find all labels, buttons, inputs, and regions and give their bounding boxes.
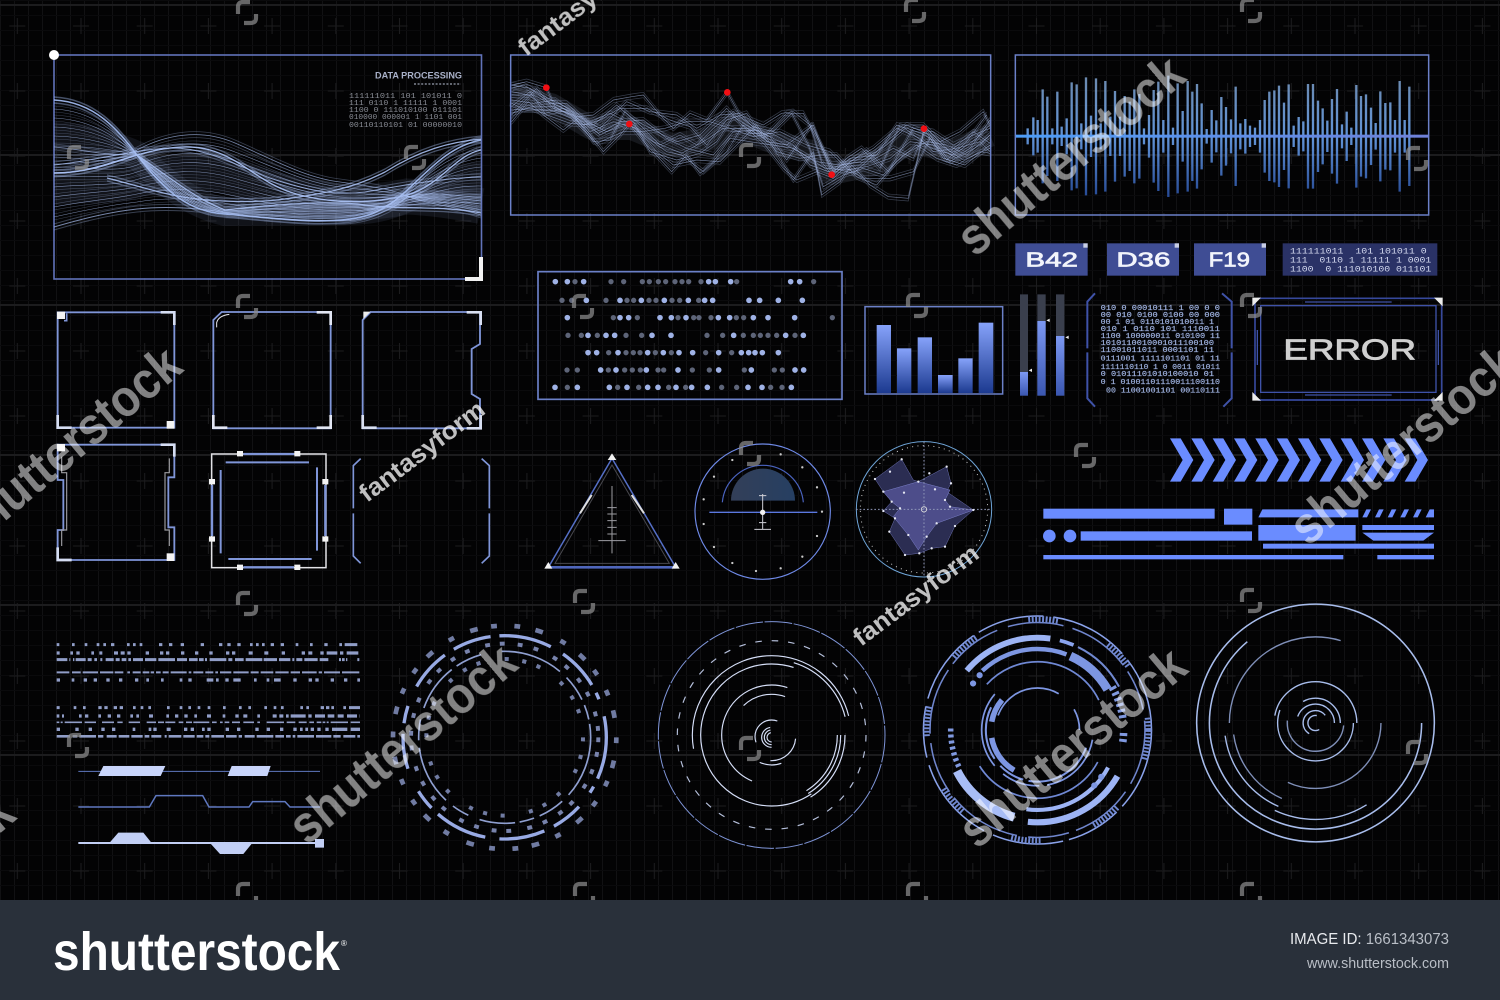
binary readout: 111 0110 1 11111 1 0001	[349, 100, 463, 108]
badge B42: B42	[1025, 249, 1078, 271]
footer logo: ®	[341, 939, 347, 948]
bracketed binary block: 1100 100000011 010100 11	[1101, 333, 1220, 341]
instruments row	[544, 442, 992, 579]
progress dots	[414, 83, 461, 85]
badge D36: D36	[1116, 249, 1170, 271]
bracketed binary block: 010 1 0110 101 1110011	[1101, 326, 1220, 334]
binary badge: 111111011 101 101011 0	[1290, 246, 1427, 256]
bracketed binary block: 00 010 0100 0100 00 000	[1101, 312, 1220, 320]
badges row	[1015, 243, 1443, 407]
error panel: ERROR	[1283, 335, 1416, 367]
panel: dot matrix	[538, 272, 1003, 399]
segmented ring	[923, 616, 1152, 844]
panel: audio waveform	[1015, 55, 1429, 215]
triangle gauge	[544, 453, 680, 569]
connector line 1	[78, 766, 320, 776]
chevron arrows	[1170, 438, 1428, 482]
bracketed binary block: 0 1 01001101110011100110	[1101, 379, 1220, 387]
frame 1	[57, 312, 174, 429]
data strips and connector lines	[57, 645, 360, 854]
binary readout	[349, 93, 463, 130]
frame 2	[213, 312, 331, 428]
binary badge	[1283, 243, 1437, 276]
thin arcs ring	[658, 622, 885, 848]
rings 1 and 2	[393, 622, 885, 849]
site url: www.shutterstock.com	[1306, 955, 1449, 972]
frame 6	[353, 459, 489, 563]
chevrons and bars	[1043, 438, 1434, 559]
badge F19: F19	[1209, 249, 1250, 271]
data strip upper	[57, 645, 360, 680]
connector line 2	[78, 796, 320, 807]
binary badge: 1100 0 111010100 011101	[1290, 265, 1431, 275]
binary readout: 00110110101 01 00000010	[349, 122, 463, 130]
binary readout: 111111011 101 101011 0	[349, 93, 463, 101]
badge F19	[1194, 243, 1266, 276]
frame 3	[363, 312, 481, 428]
wave bundle	[54, 97, 481, 230]
bracketed binary block: 1111110110 1 0 0011 01011	[1101, 364, 1220, 372]
bracketed binary block: 0111001 1111101101 01 11	[1101, 356, 1220, 364]
horizon gauge	[695, 444, 830, 579]
connector line 3	[78, 833, 324, 854]
radar chart	[856, 442, 992, 577]
frame 5	[209, 451, 328, 570]
bar chart	[865, 307, 1003, 394]
watermarks: fantasyform	[848, 539, 984, 652]
panel: data processing waves	[49, 50, 482, 279]
bracketed binary block: 11001011011 0001101 11	[1101, 347, 1214, 355]
level meters	[1020, 294, 1069, 396]
tech bars	[1043, 509, 1434, 559]
watermarks: fantasyform	[354, 395, 490, 508]
error panel	[1252, 298, 1443, 401]
watermarks: shutterstock	[945, 44, 1196, 267]
badge B42	[1015, 243, 1088, 276]
bracketed binary block: 00 11001001101 00110111	[1106, 387, 1220, 395]
bracketed binary block: 00 1 01 0110101010011 1	[1101, 319, 1214, 327]
frames group	[57, 312, 489, 570]
footer bar	[0, 900, 1500, 1000]
binary readout: 010000 000001 1 1101 001	[349, 114, 463, 122]
spiral ring	[1197, 604, 1434, 842]
bracketed binary block: 0 01011101010100010 01	[1101, 371, 1214, 379]
watermarks: shutterstock	[277, 632, 528, 855]
frame 4	[57, 444, 174, 561]
image id: IMAGE ID: 1661343073	[1290, 931, 1449, 948]
data strip lower	[57, 708, 360, 736]
dashed ring	[393, 626, 616, 849]
heading: data processing: DATA PROCESSING	[375, 70, 462, 82]
binary readout: 1100 0 111010100 011101	[349, 107, 463, 115]
badge D36	[1107, 243, 1179, 276]
bracketed binary block: 1010110010001011100100	[1101, 340, 1214, 348]
footer logo: shutterstock	[53, 922, 341, 982]
watermarks: shutterstock	[947, 636, 1198, 859]
binary badge: 111 0110 1 11111 1 0001	[1290, 255, 1431, 265]
panel: jagged line chart	[511, 55, 991, 215]
bracketed binary block: 010 0 00010111 1 00 0 0	[1101, 305, 1220, 313]
red markers	[543, 84, 927, 178]
bracketed binary block	[1087, 293, 1232, 407]
